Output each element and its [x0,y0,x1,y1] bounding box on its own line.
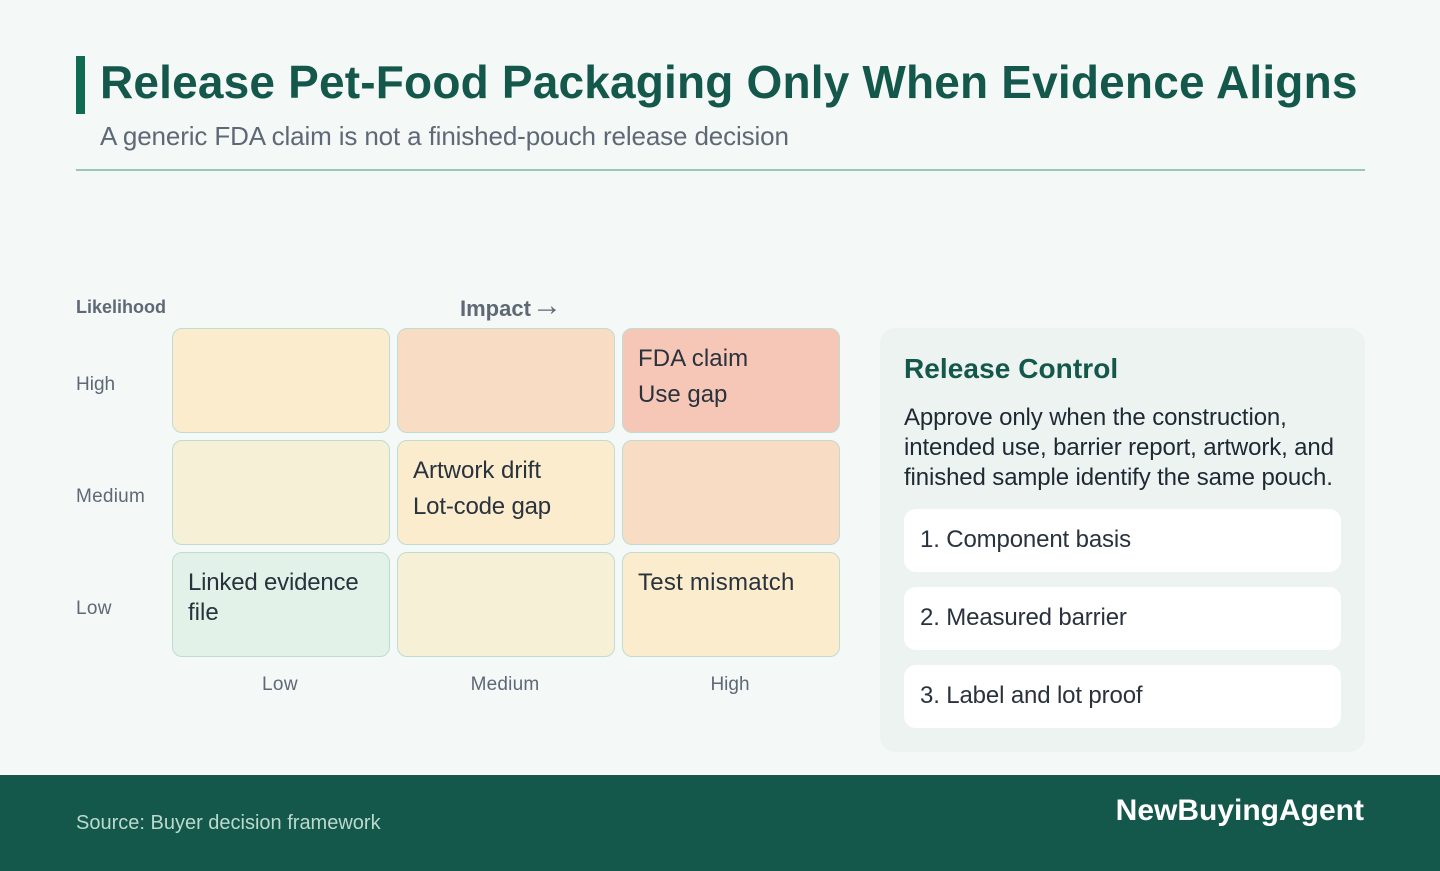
step 1 [904,509,1341,572]
x axis title: → [532,289,562,322]
brand name: NewBuyingAgent [1116,794,1364,827]
step 2 [904,587,1341,650]
cell: low impact, medium likelihood [172,440,390,545]
y label high: High [76,374,115,395]
x axis title [460,289,562,322]
step 1: 1. Component basis [920,526,1131,553]
panel body text: intended use, barrier report, artwork, and [904,434,1334,461]
cell: high impact, high likelihood [622,328,840,433]
x label medium: Medium [471,674,539,695]
cell: low impact, low likelihood: Linked evidence [188,569,358,596]
subtitle: A generic FDA claim is not a finished-pouch release decision [100,121,789,151]
panel body text [904,404,1334,491]
step 2: 2. Measured barrier [920,604,1127,631]
cell: low impact, low likelihood [172,552,390,657]
cell: medium impact, low likelihood [397,552,615,657]
footer band [0,775,1440,871]
step 3: 3. Label and lot proof [920,682,1142,709]
y label low: Low [76,598,112,619]
cell: medium impact, medium likelihood [397,440,615,545]
cell: medium impact, high likelihood [397,328,615,433]
x label low: Low [262,674,298,695]
cell: medium impact, medium likelihood: Artwork drift [413,457,541,484]
source note: Source: Buyer decision framework [76,812,381,834]
cell: low impact, high likelihood [172,328,390,433]
x axis title: Impact [460,296,531,321]
cell: high impact, high likelihood: Use gap [638,381,727,408]
cell: medium impact, medium likelihood: Lot-code gap [413,493,551,520]
panel heading: Release Control [904,353,1118,384]
panel: release control [880,328,1365,752]
panel body text: Approve only when the construction, [904,404,1287,431]
panel body text: finished sample identify the same pouch. [904,464,1333,491]
cell: low impact, low likelihood: file [188,599,219,626]
y label medium: Medium [76,486,145,507]
cell: high impact, low likelihood: Test mismatch [638,569,795,596]
title accent bar [76,56,85,114]
cell: high impact, high likelihood: FDA claim [638,345,748,372]
y axis title: Likelihood [76,297,166,317]
cell: high impact, low likelihood [622,552,840,657]
cell: high impact, medium likelihood [622,440,840,545]
step 3 [904,665,1341,728]
title: Release Pet-Food Packaging Only When Evidence Aligns [100,56,1358,108]
x label high: High [710,674,750,695]
